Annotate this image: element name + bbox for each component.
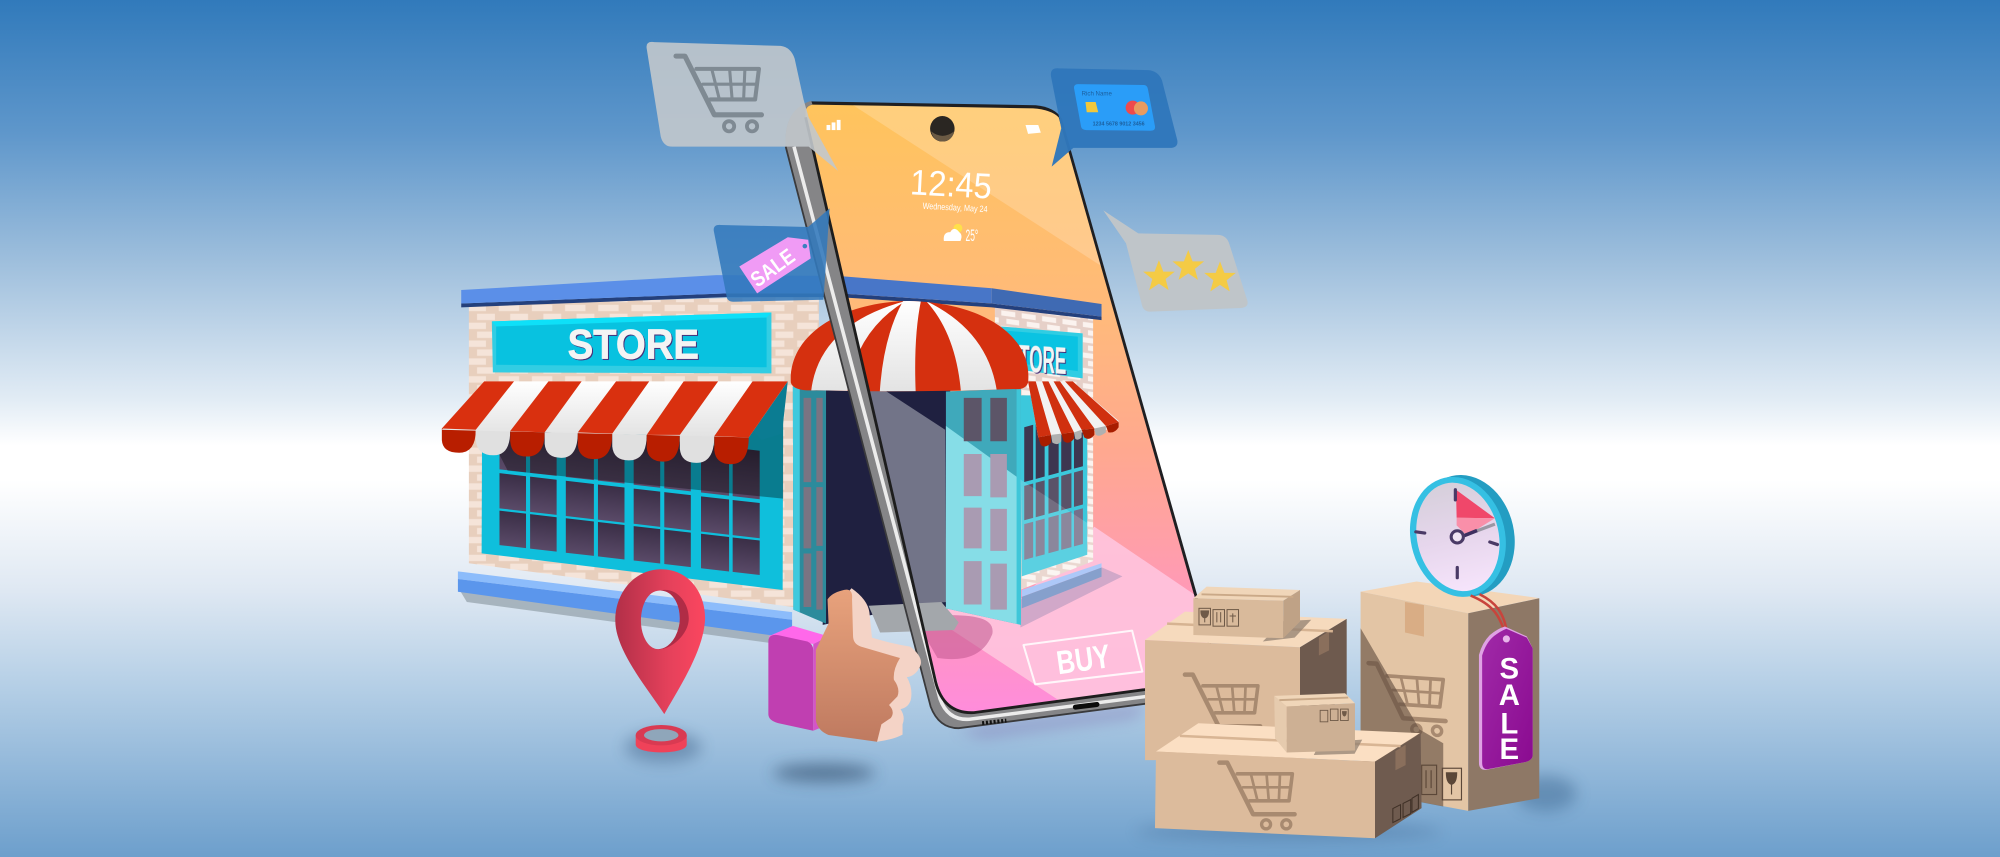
speech bubble: stars xyxy=(1103,210,1248,312)
left striped awning xyxy=(442,381,788,464)
phone metal edge xyxy=(786,101,1218,728)
speech bubble: shopping cart xyxy=(647,42,838,171)
right sign: STORE xyxy=(1008,336,1066,383)
tag text: E xyxy=(1500,733,1519,766)
weather xyxy=(944,224,978,245)
box: tall with cart and shadow xyxy=(1361,582,1539,811)
right sill xyxy=(1022,563,1102,608)
hand back xyxy=(842,588,921,742)
alarm clock xyxy=(1398,465,1527,607)
tag text: S xyxy=(1500,652,1519,685)
store left side xyxy=(442,296,819,640)
left shop window xyxy=(482,406,783,590)
sale tag xyxy=(1471,594,1533,770)
handling icons xyxy=(1199,608,1239,626)
right awning xyxy=(1028,381,1119,447)
battery icon xyxy=(1026,125,1041,134)
right wall xyxy=(995,304,1093,589)
dark interior xyxy=(823,383,950,625)
ground shadows xyxy=(459,589,1577,840)
dome awning xyxy=(790,301,1028,392)
box: large middle with cart xyxy=(1145,612,1347,760)
light beam over store front xyxy=(1020,480,1093,589)
clock time: 12:45 xyxy=(909,162,993,207)
box: small top xyxy=(1193,587,1311,641)
phone body and screen xyxy=(786,101,1224,728)
clock hand xyxy=(1451,524,1495,543)
buy button: BUY xyxy=(1054,638,1112,682)
timer wedge xyxy=(1456,490,1495,536)
speaker grille xyxy=(982,721,1006,723)
credit card: 1234 5678 9012 3456 xyxy=(1093,122,1145,128)
store roof xyxy=(461,275,1102,320)
lit interior seen in phone xyxy=(867,389,946,607)
box: long front with cart xyxy=(1155,723,1422,838)
store right side xyxy=(995,304,1119,608)
tag text: A xyxy=(1499,679,1520,712)
buy button xyxy=(1023,631,1142,684)
camera xyxy=(930,116,955,142)
hand front xyxy=(816,590,900,742)
left door leaf xyxy=(793,386,826,624)
thumbs up hand xyxy=(768,588,921,742)
cuff xyxy=(768,626,829,731)
store sign: STORE xyxy=(568,320,699,367)
tag text: L xyxy=(1500,707,1518,740)
weather: 25° xyxy=(966,226,978,245)
base sill xyxy=(458,571,792,640)
pink sale label: SALE xyxy=(746,243,799,292)
floor shadow xyxy=(926,615,993,660)
location pin xyxy=(615,569,705,752)
charging port xyxy=(1073,702,1100,710)
floor light xyxy=(948,526,1206,700)
store doorway xyxy=(793,383,1021,633)
screen light diagonal xyxy=(848,102,1102,267)
right sign xyxy=(1001,326,1083,383)
speech bubble: sale tag xyxy=(714,208,830,302)
credit card xyxy=(1074,84,1155,131)
door step xyxy=(869,602,959,633)
credit card: Rich Name xyxy=(1082,91,1112,98)
brick wall xyxy=(469,296,819,612)
signal icon xyxy=(827,120,841,130)
speech bubble: credit card xyxy=(1051,68,1177,167)
right door leaf xyxy=(946,388,1021,625)
date: Wednesday, May 24 xyxy=(922,201,988,214)
right window xyxy=(1020,395,1087,576)
box: mini xyxy=(1274,693,1362,755)
clock ticks xyxy=(1416,490,1497,578)
handling icons xyxy=(1422,765,1461,800)
store sign xyxy=(492,312,771,373)
pin base ring xyxy=(636,725,687,752)
